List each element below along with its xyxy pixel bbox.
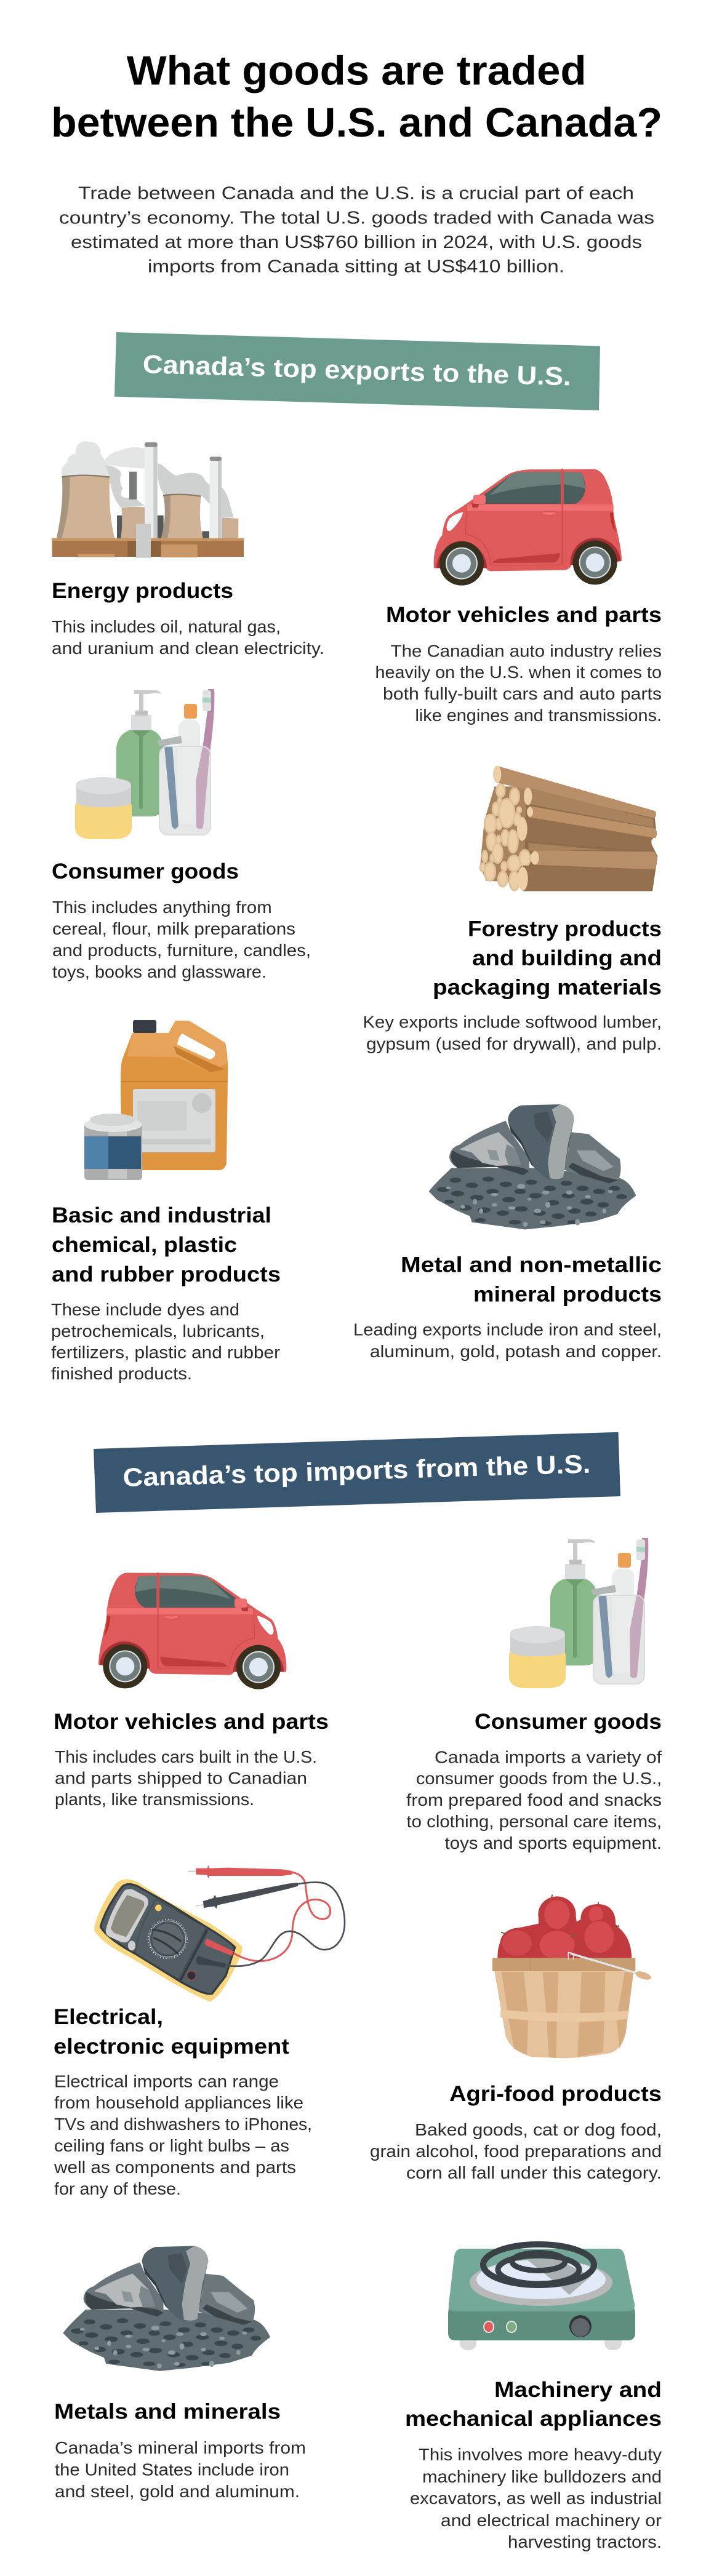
text: electrical: Electrical imports can range xyxy=(54,2072,279,2091)
text: electrical: for any of these. xyxy=(54,2179,181,2198)
heading: electrical: Electrical, xyxy=(54,2005,163,2029)
text: metal: aluminum, gold, potash and copper. xyxy=(370,1342,662,1361)
text: chemical: finished products. xyxy=(51,1364,192,1383)
icon: apple basket xyxy=(492,1894,652,2058)
heading: forestry: and building and xyxy=(472,946,662,970)
panel: agri-food products xyxy=(370,1894,662,2182)
panel: forestry products xyxy=(363,765,662,1053)
text: metal xyxy=(353,1320,662,1361)
text: consumer goods: consumer goods from the U.S., xyxy=(416,1769,662,1788)
heading: motor vehicles: Motor vehicles and parts xyxy=(386,603,662,627)
icon: rocks xyxy=(63,2246,270,2371)
icon: hot plate xyxy=(448,2244,635,2350)
title xyxy=(51,48,662,146)
icon: orange jug and can xyxy=(84,1020,228,1180)
text: electrical: well as components and parts xyxy=(54,2158,296,2177)
heading: energy products: Energy products xyxy=(52,579,233,603)
text: motor vehicles: like engines and transmissions. xyxy=(415,706,662,725)
intro text: Trade between Canada and the U.S. is a crucial part of each xyxy=(78,184,634,204)
text: energy products: This includes oil, natural gas, xyxy=(52,617,281,636)
text: metals and minerals: and steel, gold and aluminum. xyxy=(55,2482,300,2501)
banner: Canada's top imports from the U.S. xyxy=(94,1432,620,1513)
text: consumer goods: cereal, flour, milk preparations xyxy=(52,919,295,938)
icon: red car xyxy=(434,469,622,586)
panel: metal and non-metallic mineral products xyxy=(353,1104,662,1361)
heading: chemical: and rubber products xyxy=(52,1262,281,1286)
text: consumer goods: and products, furniture, candles, xyxy=(52,941,311,960)
text: machinery: This involves more heavy-duty xyxy=(419,2445,662,2464)
text: electrical: ceiling fans or light bulbs – as xyxy=(54,2136,289,2155)
panel: metals and minerals xyxy=(54,2246,306,2501)
icon: log pile xyxy=(480,765,657,891)
text: electrical: TVs and dishwashers to iPhones, xyxy=(54,2115,312,2134)
title: between the U.S. and Canada? xyxy=(51,100,662,146)
text: consumer goods xyxy=(52,898,311,981)
intro text xyxy=(59,184,654,276)
text: agri-food: Baked goods, cat or dog food, xyxy=(415,2120,662,2139)
heading: motor vehicles: Motor vehicles and parts xyxy=(54,1710,329,1734)
heading: machinery: mechanical appliances xyxy=(405,2407,662,2431)
icon: toiletries xyxy=(75,689,214,839)
panel: energy products xyxy=(52,441,324,658)
heading: electrical: electronic equipment xyxy=(54,2035,289,2059)
text: motor vehicles: both fully-built cars and auto parts xyxy=(383,684,662,703)
banner: Canada's top exports to the U.S.: Canada’s top exports to the U.S. xyxy=(142,349,571,391)
panel: consumer goods (exports) xyxy=(52,689,311,981)
text: metal: Leading exports include iron and steel, xyxy=(353,1320,662,1339)
intro text: country’s economy. The total U.S. goods traded with Canada was xyxy=(59,208,654,228)
title: What goods are traded xyxy=(127,48,587,94)
text: chemical xyxy=(51,1300,280,1383)
heading: machinery: Machinery and xyxy=(494,2378,662,2402)
icon: power plant xyxy=(52,441,244,558)
heading: chemical: Basic and industrial xyxy=(52,1203,271,1227)
text: metals and minerals: the United States include iron xyxy=(55,2460,289,2479)
icon: toiletries xyxy=(509,1538,648,1688)
heading: metal: Metal and non-metallic xyxy=(401,1253,662,1277)
text: forestry xyxy=(363,1013,662,1053)
panel: motor vehicles and parts (imports) xyxy=(54,1573,329,1809)
heading: chemical xyxy=(52,1203,281,1286)
text: electrical xyxy=(54,2072,312,2198)
heading: consumer goods: Consumer goods xyxy=(52,859,239,883)
text: motor vehicles: This includes cars built in the U.S. xyxy=(55,1747,317,1766)
text: consumer goods xyxy=(406,1748,662,1852)
text: forestry: Key exports include softwood lumber, xyxy=(363,1013,662,1031)
text: machinery: and electrical machinery or xyxy=(441,2511,662,2530)
text: machinery xyxy=(410,2445,662,2551)
text: motor vehicles: The Canadian auto industry relies xyxy=(391,641,662,660)
text: energy products xyxy=(52,617,324,658)
heading: forestry: packaging materials xyxy=(433,976,662,999)
heading: forestry: Forestry products xyxy=(468,917,662,941)
text: energy products: and uranium and clean electricity. xyxy=(52,639,324,658)
heading: forestry xyxy=(433,917,662,999)
text: chemical: fertilizers, plastic and rubber xyxy=(51,1343,280,1362)
icon: rocks xyxy=(429,1104,636,1229)
text: consumer goods: from prepared food and snacks xyxy=(406,1790,662,1809)
text: motor vehicles: plants, like transmissions. xyxy=(55,1790,254,1809)
text: forestry: gypsum (used for drywall), and pulp. xyxy=(366,1034,662,1053)
text: machinery: machinery like bulldozers and xyxy=(422,2467,662,2486)
text: agri-food: grain alcohol, food preparations and xyxy=(370,2142,662,2161)
intro text: estimated at more than US$760 billion in 2024, with U.S. goods xyxy=(71,233,642,252)
text: chemical: petrochemicals, lubricants, xyxy=(51,1322,265,1341)
panel: electrical, electronic equipment xyxy=(54,1865,345,2198)
icon: multimeter xyxy=(94,1865,345,2001)
banner: Canada's top imports from the U.S.: Canada’s top imports from the U.S. xyxy=(122,1449,591,1492)
icon: red car xyxy=(98,1573,286,1689)
heading: metals and minerals: Metals and minerals xyxy=(54,2400,281,2424)
text: motor vehicles xyxy=(375,641,662,725)
banner: Canada's top exports to the U.S. xyxy=(114,332,600,410)
text: machinery: harvesting tractors. xyxy=(508,2532,662,2551)
text: machinery: excavators, as well as industrial xyxy=(410,2489,662,2508)
text: motor vehicles: heavily on the U.S. when it comes to xyxy=(375,663,662,682)
text: metals and minerals xyxy=(55,2438,306,2501)
heading: agri-food: Agri-food products xyxy=(449,2082,662,2106)
heading: electrical xyxy=(54,2005,289,2059)
heading: chemical: chemical, plastic xyxy=(52,1233,237,1257)
text: motor vehicles: and parts shipped to Canadian xyxy=(55,1769,307,1788)
panel: chemical, plastic and rubber products xyxy=(51,1020,281,1383)
panel: consumer goods (imports) xyxy=(406,1538,662,1852)
text: electrical: from household appliances like xyxy=(54,2093,303,2112)
heading: metal xyxy=(401,1253,662,1307)
heading: consumer goods: Consumer goods xyxy=(475,1710,662,1734)
text: consumer goods: Canada imports a variety of xyxy=(435,1748,662,1767)
panel: machinery and mechanical appliances xyxy=(405,2244,662,2551)
text: consumer goods: This includes anything from xyxy=(52,898,272,917)
heading: machinery xyxy=(405,2378,662,2431)
text: agri-food: corn all fall under this category. xyxy=(406,2163,662,2182)
text: metals and minerals: Canada’s mineral imports from xyxy=(55,2438,306,2457)
text: consumer goods: to clothing, personal care items, xyxy=(406,1812,662,1831)
text: consumer goods: toys and sports equipment. xyxy=(445,1833,662,1852)
text: consumer goods: toys, books and glassware. xyxy=(52,962,267,981)
heading: metal: mineral products xyxy=(473,1282,662,1307)
intro text: imports from Canada sitting at US$410 billion. xyxy=(148,257,564,276)
text: motor vehicles xyxy=(55,1747,317,1809)
panel: motor vehicles and parts (exports) xyxy=(375,469,662,725)
text: chemical: These include dyes and xyxy=(51,1300,239,1319)
text: agri-food xyxy=(370,2120,662,2182)
